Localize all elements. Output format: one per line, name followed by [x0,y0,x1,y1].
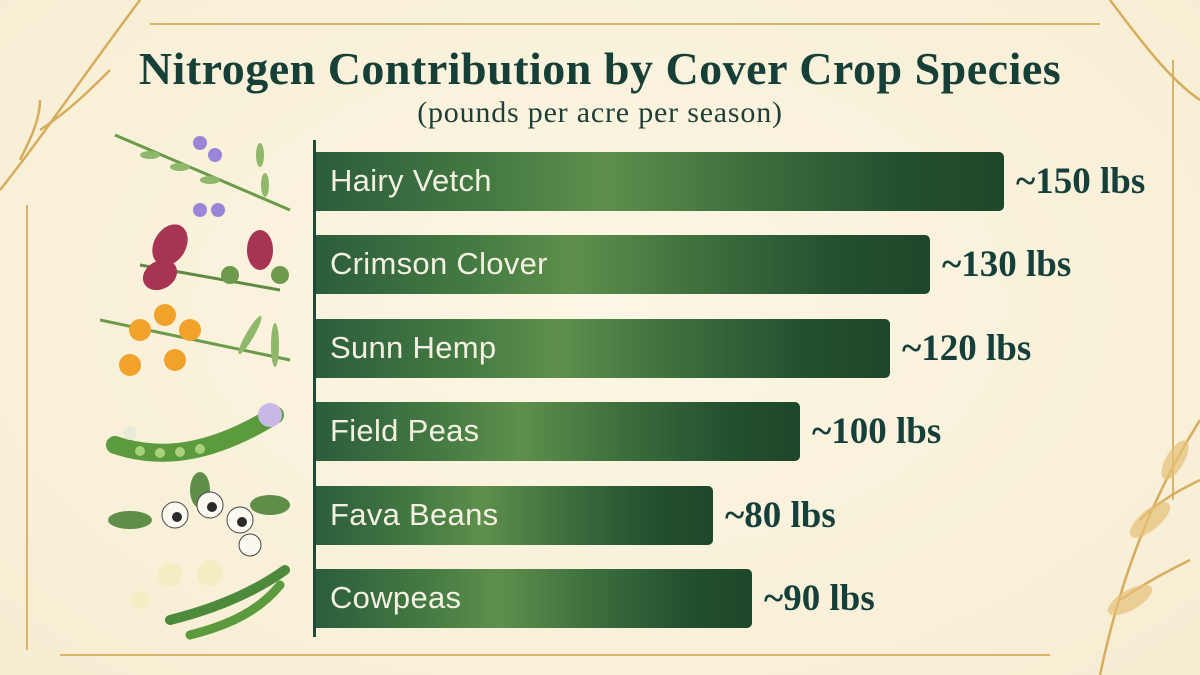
icon: cowpeas [131,560,285,635]
value: Fava Beans: ~80 lbs [725,495,836,536]
value: Sunn Hemp: ~120 lbs [902,328,1031,369]
bar: Cowpeas: Cowpeas [330,580,461,615]
icon: hairy vetch [115,135,290,217]
value: Crimson Clover: ~130 lbs [942,244,1071,285]
axis line [313,140,316,637]
icon: sunn hemp [100,304,290,376]
icon: field peas [115,403,282,458]
bar: Hairy Vetch [316,152,1004,211]
bar: Cowpeas [316,569,752,628]
icon: plants column [100,134,290,640]
bar: Field Peas [316,402,800,461]
value: Field Peas: ~100 lbs [812,411,941,452]
value: Hairy Vetch: ~150 lbs [1016,161,1145,202]
bar: Fava Beans: Fava Beans [330,497,498,532]
bar: Crimson Clover [316,235,930,294]
bar: Hairy Vetch: Hairy Vetch [330,163,492,198]
bar: Fava Beans [316,486,713,545]
icon: crimson clover [137,218,289,296]
bar: Sunn Hemp [316,319,890,378]
bar: Sunn Hemp: Sunn Hemp [330,330,496,365]
subtitle: (pounds per acre per season) [417,96,783,129]
bar: Field Peas: Field Peas [330,413,479,448]
icon: fava beans [108,472,290,556]
title: Nitrogen Contribution by Cover Crop Species [139,43,1061,94]
bar: Crimson Clover: Crimson Clover [330,246,548,281]
value: Cowpeas: ~90 lbs [764,578,875,619]
